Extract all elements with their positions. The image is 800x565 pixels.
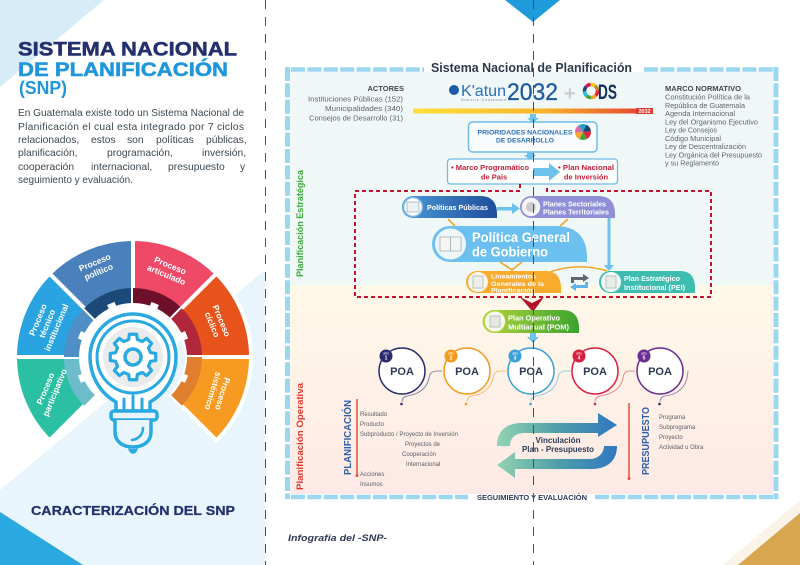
pill: plan operativo multianual: Plan Operativo [508,314,561,322]
POA 2 [444,348,507,405]
arrows: vinculación plan-presupuesto: Vinculación [536,436,581,445]
side label: planificación operativa: Planificación Operativa [295,382,305,490]
pill: planes sectoriales y territoriales: Planes Territoriales [543,210,609,216]
pill: lineamientos generales: Lineamientos [491,274,536,280]
marco normativo text: Constitución Política de la [665,92,751,102]
intro paragraph: En Guatemala existe todo un Sistema Nacional de [18,108,244,119]
POA 1: POA [390,366,414,378]
intro paragraph: y [240,162,246,173]
footer credit: Infografía del -SNP- [288,533,387,544]
box: prioridades nacionales: PRIORIDADES NACIONALES [478,130,573,136]
box: marco programático and plan nacional: • Plan Nacional [558,163,614,172]
actores text: ACTORES [367,84,404,93]
intro paragraph: Planificación el cual esta integrado por 7 ciclos [18,122,244,133]
title: DE PLANIFICACIÓN [18,59,228,81]
sector: proceso sistémico: sistémico [203,371,224,411]
background: top blue triangle [505,0,560,22]
block: presupuesto list: Subprograma [659,425,696,431]
block: presupuesto list: Actividad u Obra [659,445,704,451]
marco normativo text: Ley del Organismo Ejecutivo [665,118,758,126]
intro paragraph: seguimiento y evaluación. [18,175,133,186]
block: planificación list: Cooperación [402,452,436,458]
box: marco programático and plan nacional [448,159,618,184]
intro paragraph: planificación, [18,148,78,159]
pill: políticas públicas [402,196,497,218]
intro paragraph: cooperación [18,162,74,173]
sector: proceso sistémico: Proceso [213,376,232,411]
intro paragraph: programación, [107,148,173,159]
sector: proceso político [50,239,133,319]
sector: proceso técnico institucional: técnico [37,308,57,339]
sector: proceso participativo [15,357,95,440]
arrow: bar to priorities [527,114,539,123]
logo: K'atun 2032: Nuestra Guatemala [461,98,506,102]
POA 4 [572,348,635,405]
POA 1 [379,348,442,405]
block: presupuesto list [628,403,704,480]
sector: proceso técnico institucional: Proceso [27,302,49,337]
icon: exchange arrows [570,274,589,291]
title: (SNP) [19,78,67,98]
side label: planificación estratégica: Planificación Estratégica [295,169,305,277]
pill: planes sectoriales y territoriales: Planes Sectoriales [543,202,606,208]
marco normativo text [665,84,762,168]
arrow: POM to POA [527,333,539,343]
actores text: Consejos de Desarrollo (31) [309,114,403,122]
POA 2: 2 [450,356,453,362]
box: prioridades nacionales [468,122,597,152]
block: presupuesto list: Programa [659,415,686,421]
block: presupuesto list: Proyecto [659,435,683,441]
box: prioridades nacionales: DE DESARROLLO [496,138,554,144]
arrows: vinculación plan-presupuesto: Plan - Presupuesto [522,445,594,454]
diagram title: Sistema Nacional de Planificación [431,61,632,75]
POA 3 [508,348,571,405]
timeline bar 2032 [413,108,653,115]
pill: política general de gobierno: Política General [472,230,570,245]
POA 4: 4 [578,356,581,362]
logo: K'atun 2032 [449,79,558,106]
background: bottom-right tan triangle [723,500,800,565]
block: planificación list: Proyectos de [405,442,441,448]
background: lower-left pale area [0,270,265,565]
pill: lineamientos generales [466,271,561,294]
arrow: red chevron [520,297,544,312]
pill: lineamientos generales: Planificación [491,288,535,294]
logo: ODS [584,81,617,104]
plus sign: + [564,83,576,105]
logo: K'atun 2032: 2032 [507,79,558,106]
pill: lineamientos generales: Generales de la [491,281,544,288]
sector: proceso técnico institucional [15,274,95,357]
POA 4: año [576,352,582,356]
background: lower-left blue triangle [0,512,83,565]
intro paragraph: estos [91,135,116,146]
label: seguimiento y evaluación: SEGUIMIENTO Y EVALUACIÓN [477,493,587,502]
POA 2: POA [455,366,479,378]
box: marco programático and plan nacional: de País [481,172,507,182]
sector: proceso cíclico [171,274,251,357]
pill: plan estratégico institucional: Institucional (PEI) [624,283,686,292]
pill: plan estratégico institucional [599,271,695,293]
intro paragraph: presupuesto [168,162,225,173]
POA 5: 5 [643,356,646,362]
title: SISTEMA NACIONAL [18,40,237,60]
marco normativo text: MARCO NORMATIVO [665,84,741,93]
POA 5 [637,348,688,405]
intro paragraph: inversión, [202,148,246,159]
block: planificación list: Insumos [360,482,383,488]
marco normativo text: Ley Orgánica del Presupuesto [665,150,762,160]
connector: orange lines to política general [448,219,568,270]
marco normativo text: Código Municipal [665,134,721,143]
sector: proceso participativo: participativo [40,367,69,418]
sector: proceso cíclico: cíclico [203,310,222,339]
marco normativo text: Agenda Internacional [665,109,735,118]
block: planificación list: Producto [360,422,385,428]
pill: plan operativo multianual [483,310,579,333]
panel background: strategic area [290,72,773,285]
POA 1: 1 [385,356,388,362]
timeline bar 2032: 2032 [638,109,651,115]
arrow: priorities to programme boxes [524,152,536,160]
intro paragraph: políticas [156,135,194,146]
POA 5: POA [648,366,672,378]
panel: system diagram [288,67,778,499]
sector: proceso cíclico: Proceso [211,303,233,338]
block: planificación list: Subproducto / Proyecto de Inversión [360,432,458,438]
POA 3: 3 [514,356,517,362]
marco normativo text: Ley de Consejos [665,126,717,134]
marco normativo text: Ley de Descentralización [665,142,746,151]
block: planificación list: Acciones [360,472,384,478]
process wheel [15,239,251,440]
box: marco programático and plan nacional: • Marco Programático [451,163,529,172]
dashed panel frame [288,67,778,499]
arrow: planes to PEI [604,218,614,271]
caption: caracterización: CARACTERIZACIÓN DEL SNP [31,503,235,518]
arrows: vinculación plan-presupuesto [497,413,617,478]
gear notches on the wheel band [78,302,188,383]
arrow: marco to plan [533,163,560,181]
connector: orange curve lineamientos to PEI [550,267,607,272]
block: planificación list: Resultado [360,412,388,418]
POA 2: año [448,352,454,356]
pill: política general de gobierno: de Gobierno [472,244,548,260]
block: planificación list [341,399,458,488]
intro paragraph: son [127,135,144,146]
POA 4: POA [583,366,607,378]
actores text [308,84,404,122]
POA 1: año [383,352,389,356]
sector: proceso participativo: Proceso [34,371,56,406]
sector: proceso político: Proceso [77,251,112,273]
title [18,40,237,98]
sector: proceso sistémico [171,357,251,440]
sector: proceso político: político [83,261,114,282]
logo: ODS: DS [598,81,617,104]
sector: proceso articulado [133,239,216,319]
intro paragraph: públicas, [206,135,247,146]
icon: priorities pie [579,128,587,136]
icon: light bulb with gear [90,314,176,453]
actores text: Municipalidades (340) [325,104,404,113]
pill: plan estratégico institucional: Plan Estratégico [624,274,681,283]
dashed red strategic group [355,184,711,297]
background: top-left triangle [0,0,104,87]
pill: políticas públicas: Políticas Públicas [427,203,488,212]
intro paragraph: internacional, [91,162,152,173]
pill: planes sectoriales y territoriales [520,196,615,218]
POA 5: año [641,352,647,356]
intro paragraph [18,108,247,186]
box: marco programático and plan nacional: de Inversión [564,172,609,182]
block: planificación list: PLANIFICACIÓN [341,400,354,475]
marco normativo text: y su Reglamento [665,158,719,168]
intro paragraph: relacionados, [18,135,79,146]
POA 3: año [512,352,518,356]
logo: K'atun 2032: K'atun [461,83,506,100]
arrow: políticas to planes [497,203,520,214]
pill: política general de gobierno [432,226,587,262]
POA 3: POA [519,366,543,378]
sector: proceso articulado: Proceso [153,254,188,276]
sector: proceso técnico institucional: institucional [42,302,71,352]
sector: proceso articulado: articulado [146,262,187,287]
actores text: Instituciones Públicas (152) [308,94,404,104]
block: planificación list: Internacional [406,462,440,468]
pill: plan operativo multianual: Multianual (POM) [508,322,570,332]
marco normativo text: República de Guatemala [665,101,746,110]
block: presupuesto list: PRESUPUESTO [641,407,652,475]
panel background: operational area [290,285,773,494]
